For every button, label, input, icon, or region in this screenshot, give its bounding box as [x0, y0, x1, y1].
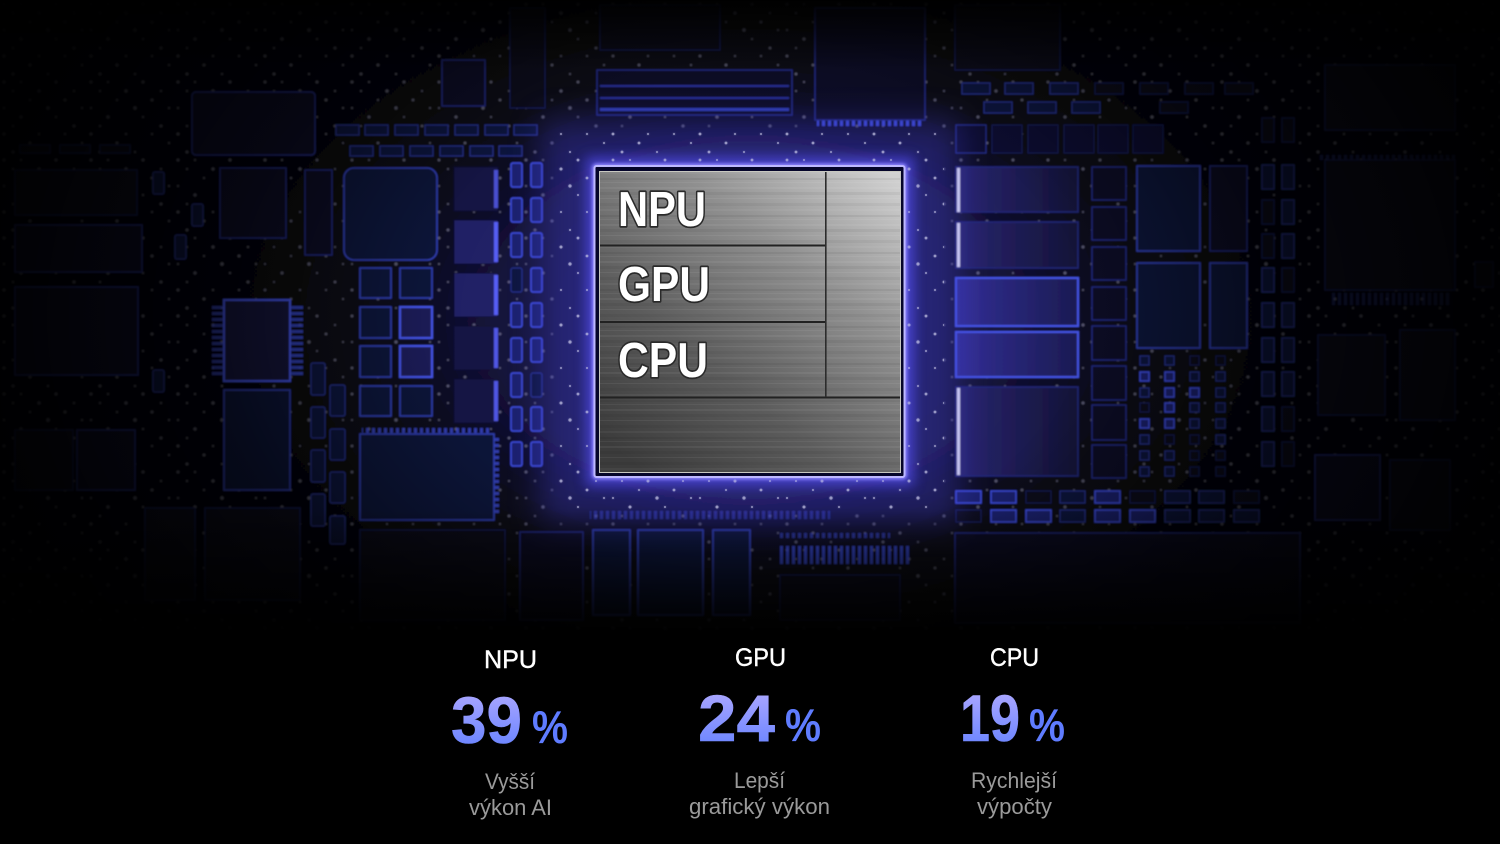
- stat: GPU 24%: %: [785, 699, 821, 751]
- chip label: NPU: NPU: [618, 183, 706, 237]
- circuit board background: [0, 0, 1500, 660]
- stat: GPU 24%: GPU: [735, 644, 786, 672]
- central chip: [594, 166, 904, 477]
- stat: CPU 19%: 19: [960, 681, 1020, 755]
- stat: NPU 39%: výkon AI: [469, 795, 552, 820]
- small paired components: [153, 163, 542, 544]
- chip label: CPU: CPU: [618, 334, 708, 388]
- stat: GPU 24%: grafický výkon: [689, 794, 830, 819]
- left board components: [15, 92, 499, 600]
- stat: CPU 19%: Rychlejší: [971, 768, 1057, 793]
- stat: CPU 19%: %: [1029, 699, 1065, 751]
- right component column: [1092, 166, 1247, 478]
- far-right dim components: [1315, 65, 1493, 530]
- small square array: [1140, 356, 1225, 476]
- stat: GPU 24%: 24: [698, 681, 775, 755]
- left capacitor stack: [454, 167, 498, 423]
- right memory blocks: [956, 125, 1163, 476]
- stat: NPU 39%: 39: [451, 683, 522, 757]
- stat: NPU 39%: %: [532, 701, 568, 753]
- stat: CPU 19%: [960, 644, 1065, 819]
- stat: GPU 24%: Lepší: [734, 768, 785, 793]
- top board components: [336, 5, 1253, 156]
- bottom board components: [360, 511, 1300, 623]
- chip glow: [540, 120, 960, 524]
- stat: CPU 19%: výpočty: [977, 794, 1052, 819]
- square pad grid: [360, 268, 432, 416]
- stat: CPU 19%: CPU: [990, 644, 1039, 672]
- stat: NPU 39%: [451, 646, 568, 820]
- chip label: GPU: GPU: [618, 258, 710, 312]
- stat: NPU 39%: NPU: [484, 646, 537, 674]
- stat: GPU 24%: [689, 644, 830, 819]
- right-side small components: [956, 118, 1294, 522]
- stat: NPU 39%: Vyšší: [485, 769, 535, 794]
